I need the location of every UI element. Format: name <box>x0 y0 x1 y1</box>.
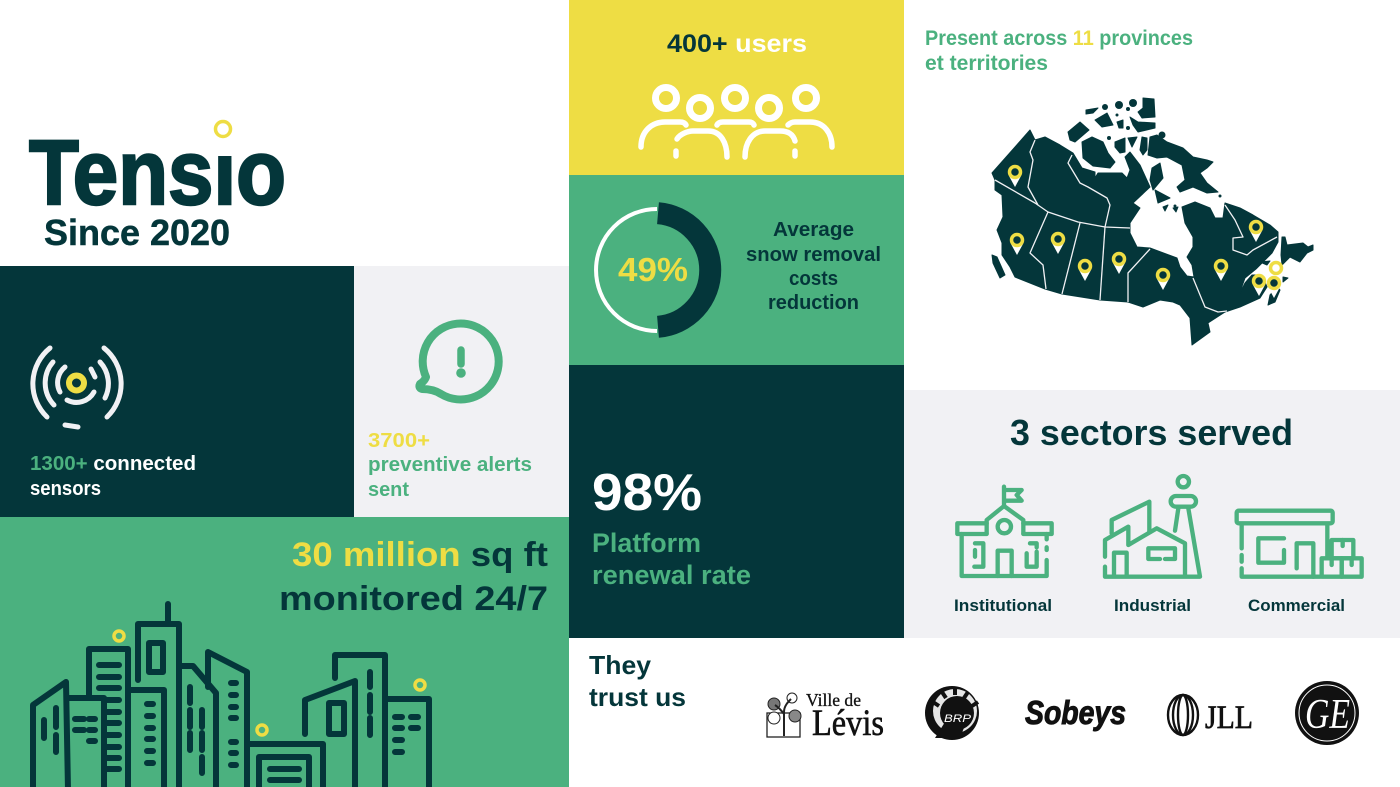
icon: commercial warehouse <box>1237 511 1362 577</box>
label: industrial: Industrial <box>1114 596 1191 615</box>
panel: title <box>0 0 569 266</box>
heading: sectors: 3 sectors served <box>1010 412 1293 453</box>
logo: BRP: BRP <box>944 713 972 725</box>
logo: GE: GE <box>1305 692 1350 738</box>
panel: connected sensors <box>0 266 354 517</box>
text: provinces line one: Present across 11 provinces <box>925 27 1193 50</box>
logo: Ville de Levis <box>767 690 884 744</box>
text: reduction label <box>746 219 881 314</box>
text: reduction label: Average <box>773 219 854 241</box>
provincial borders <box>995 140 1277 312</box>
text: donut value: 49% <box>618 251 688 288</box>
icon: title ring <box>216 122 230 136</box>
heading: users: 400+ users <box>667 30 807 58</box>
icons: location pins <box>1009 166 1282 298</box>
heading: they: They <box>589 650 652 680</box>
title: Tensio <box>29 122 286 224</box>
panel: cost reduction <box>569 175 904 365</box>
icons: sector buildings <box>957 476 1362 577</box>
icon: sensor <box>33 348 121 427</box>
text: renewal label one: Platform <box>592 528 701 558</box>
icon: institutional building <box>957 487 1052 576</box>
text: reduction label: reduction <box>768 292 859 314</box>
logo: GE <box>1295 681 1359 745</box>
lake in Baffin island <box>1172 166 1178 174</box>
text: renewal label two: renewal rate <box>592 560 751 590</box>
text: provinces line two: et territories <box>925 52 1048 75</box>
panel: sectors served <box>904 390 1400 638</box>
icon: group of people <box>641 88 832 157</box>
text: reduction label: costs <box>789 268 838 290</box>
subtitle: Since 2020 <box>44 212 230 253</box>
heading: 30 million sq ft: 30 million sq ft <box>292 536 548 574</box>
text: sensors label: sensors <box>30 478 101 500</box>
label: institutional: Institutional <box>954 596 1052 615</box>
text: reduction label: snow removal <box>746 244 881 266</box>
heading: monitored: monitored 24/7 <box>279 580 548 618</box>
panel: preventive alerts <box>354 266 569 517</box>
text: alerts line two: sent <box>368 479 409 501</box>
panel: renewal rate <box>569 365 904 638</box>
icon: city skyline <box>33 604 429 787</box>
panel: square footage <box>0 517 569 787</box>
text: renewal value: 98% <box>592 464 702 522</box>
heading: trust us: trust us <box>589 682 686 712</box>
logo: Sobeys: Sobeys <box>1025 694 1126 731</box>
panel: users <box>569 0 904 175</box>
logo: JLL <box>1168 695 1253 736</box>
logo: JLL: JLL <box>1205 700 1253 736</box>
logo: BRP <box>925 686 979 740</box>
map: Canada <box>992 98 1313 345</box>
logo: Ville de Levis: Lévis <box>812 703 884 744</box>
label: commercial: Commercial <box>1248 596 1345 615</box>
icon: industrial factory <box>1105 476 1200 577</box>
panel: map of Canada <box>925 27 1313 345</box>
icon: alert bubble <box>419 324 499 400</box>
text: alerts line one: preventive alerts <box>368 454 532 476</box>
mask over the i dot <box>205 120 241 156</box>
logo: Ville de Levis: Ville de <box>806 690 861 710</box>
panel: clients <box>589 650 1359 745</box>
text: sensors count: 1300+ connected <box>30 453 196 475</box>
chart: donut 49 percent <box>596 209 710 331</box>
text: alerts count: 3700+ <box>368 430 430 452</box>
